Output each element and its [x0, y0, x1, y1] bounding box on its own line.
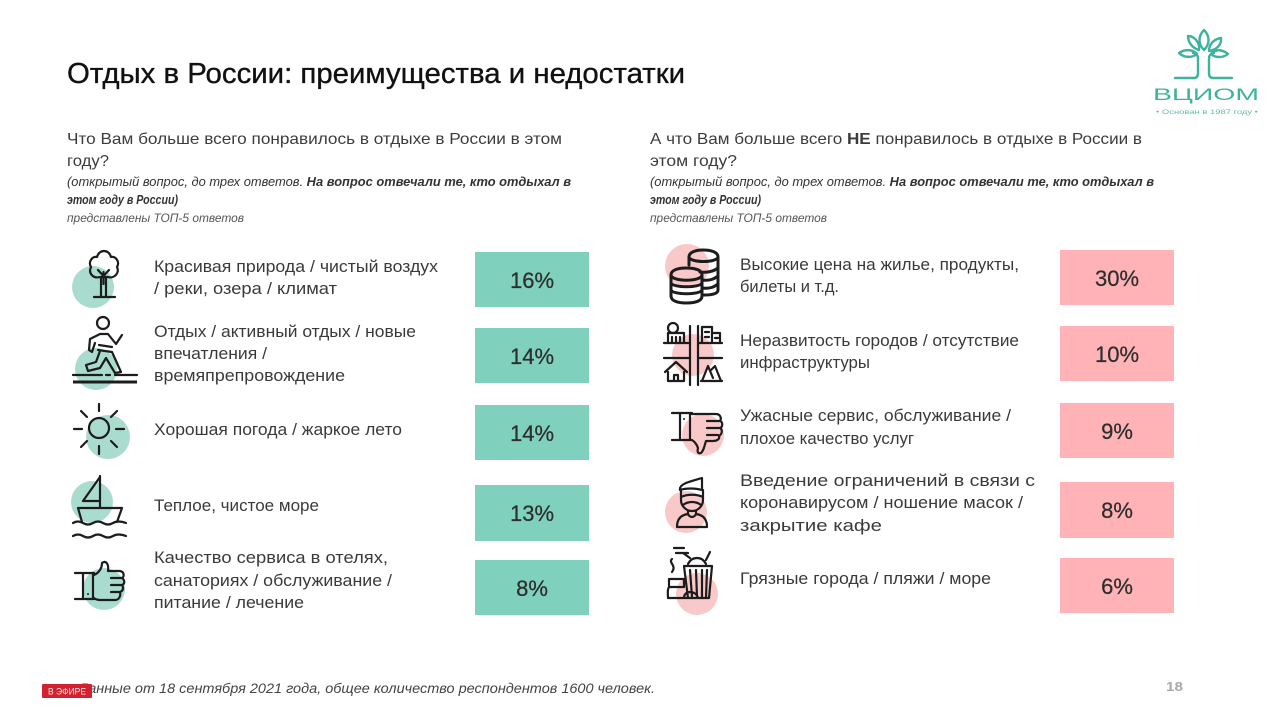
- label: undeveloped cities: Неразвитость городов / отсутствие: [740, 332, 1019, 350]
- icon: thumbs up: [75, 562, 125, 610]
- label: covid restrictions: коронавирусом / ношение масок /: [740, 494, 1023, 512]
- value: 14%: [475, 328, 589, 383]
- label: active rest: времяпрепровождение: [154, 367, 345, 385]
- question: disliked: [650, 131, 1154, 225]
- question: disliked: этом году в России): [650, 193, 761, 207]
- row: dirty places: [668, 548, 1174, 615]
- value: 16%: [475, 252, 589, 307]
- row: nature: [72, 251, 589, 308]
- value: 8%: [475, 560, 589, 615]
- badge: on air: В ЭФИРЕ: [48, 686, 86, 696]
- label: high prices: Высокие цена на жилье, продукты,: [740, 256, 1019, 274]
- panel: what respondents liked: [67, 131, 589, 615]
- label: nature: / реки, озера / климат: [154, 280, 337, 298]
- logo: VCIOM: ВЦИОМ: [1153, 85, 1259, 104]
- icon: sailboat: [71, 476, 126, 538]
- label: high prices: билеты и т.д.: [740, 278, 839, 296]
- question: disliked: (открытый вопрос, до трех ответов. На вопрос отвечали те, кто отдыхал в: [650, 175, 1154, 189]
- label: weather: Хорошая погода / жаркое лето: [154, 421, 402, 439]
- value: 16%: 16%: [510, 268, 554, 293]
- question: liked: представлены ТОП-5 ответов: [67, 211, 244, 225]
- label: terrible service: [740, 407, 1011, 448]
- row: sea: [71, 476, 589, 541]
- footnote: data source: Данные от 18 сентября 2021 года, общее количество респондентов 1600 человек.: [76, 681, 655, 696]
- label: undeveloped cities: инфраструктуры: [740, 354, 870, 372]
- label: covid restrictions: закрытие кафе: [740, 517, 882, 535]
- label: service: [154, 549, 392, 612]
- badge: on air: [42, 684, 92, 698]
- panel: what respondents disliked: [650, 131, 1174, 615]
- label: active rest: Отдых / активный отдых / новые: [154, 323, 416, 341]
- question: liked: [67, 131, 571, 225]
- row: terrible service: [672, 403, 1174, 458]
- row: weather: [74, 404, 589, 460]
- label: dirty places: Грязные города / пляжи / море: [740, 570, 991, 588]
- question: liked: Что Вам больше всего понравилось в отдыхе в России в этом: [67, 131, 562, 148]
- value: 30%: 30%: [1095, 266, 1139, 291]
- value: 9%: [1060, 403, 1174, 458]
- label: covid restrictions: Введение ограничений в связи с: [740, 472, 1035, 490]
- value: 10%: 10%: [1095, 342, 1139, 367]
- question: liked: (открытый вопрос, до трех ответов. На вопрос отвечали те, кто отдыхал в: [67, 175, 571, 189]
- label: high prices: [740, 256, 1019, 296]
- question: disliked: представлены ТОП-5 ответов: [650, 211, 827, 225]
- icon: sun: [74, 404, 130, 459]
- icon: person in mask: [665, 478, 707, 533]
- value: 14%: [475, 405, 589, 460]
- value: 14%: 14%: [510, 344, 554, 369]
- icon: tree: [72, 251, 118, 308]
- logo: VCIOM: • Основан в 1987 году •: [1156, 109, 1259, 116]
- row: covid restrictions: [665, 472, 1174, 538]
- row: active rest: [73, 317, 589, 390]
- label: sea: Теплое, чистое море: [154, 497, 319, 515]
- label: active rest: [154, 323, 416, 385]
- label: undeveloped cities: [740, 332, 1019, 372]
- page number: 18: [1166, 679, 1183, 694]
- value: 6%: [1060, 558, 1174, 613]
- label: service: питание / лечение: [154, 594, 304, 612]
- label: nature: Красивая природа / чистый воздух: [154, 258, 439, 276]
- row: high prices: [665, 244, 1174, 305]
- row: service: [75, 549, 589, 615]
- question: disliked: этом году?: [650, 153, 737, 170]
- value: 30%: [1060, 250, 1174, 305]
- label: service: санаториях / обслуживание /: [154, 572, 392, 590]
- value: 9%: 9%: [1101, 419, 1133, 444]
- value: 13%: [475, 485, 589, 541]
- value: 10%: [1060, 326, 1174, 381]
- row: undeveloped cities: [664, 323, 1174, 385]
- label: terrible service: Ужасные сервис, обслуживание /: [740, 407, 1011, 425]
- title: Отдых в России: преимущества и недостатки: [67, 58, 685, 90]
- value: 8%: 8%: [516, 576, 548, 601]
- label: active rest: впечатления /: [154, 345, 267, 363]
- label: terrible service: плохое качество услуг: [740, 430, 914, 448]
- value: 14%: 14%: [510, 421, 554, 446]
- icon: coins: [665, 244, 718, 303]
- label: service: Качество сервиса в отелях,: [154, 549, 388, 567]
- label: nature: [154, 258, 439, 298]
- icon: runner: [73, 317, 137, 390]
- icon: city infrastructure: [664, 323, 722, 385]
- question: liked: году?: [67, 153, 109, 170]
- icon: thumbs down: [672, 413, 724, 456]
- question: disliked: А что Вам больше всего НЕ понравилось в отдыхе в России в: [650, 131, 1142, 148]
- value: 8%: [1060, 482, 1174, 538]
- value: 13%: 13%: [510, 501, 554, 526]
- label: covid restrictions: [740, 472, 1035, 535]
- icon: trash bin: [668, 548, 718, 615]
- question: liked: этом году в России): [67, 193, 178, 207]
- value: 6%: 6%: [1101, 574, 1133, 599]
- logo: VCIOM: [1153, 30, 1259, 116]
- value: 8%: 8%: [1101, 498, 1133, 523]
